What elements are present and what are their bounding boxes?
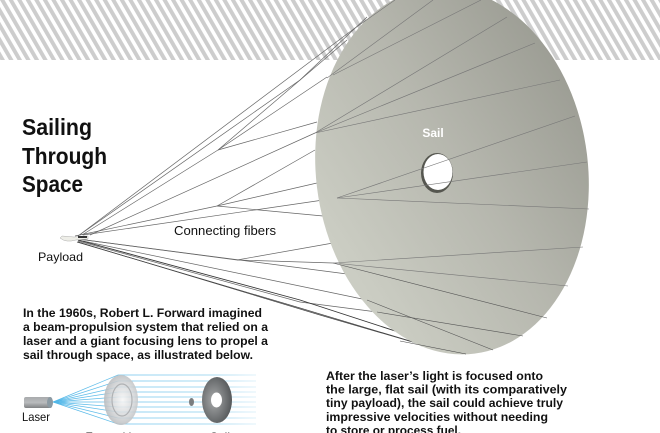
intro text: In the 1960s, Robert L. Forward imagined — [23, 307, 262, 320]
fibers across the sail — [315, 0, 589, 354]
small sail — [202, 377, 232, 423]
sail disc — [295, 0, 609, 370]
closing text: After the laser’s light is focused onto — [326, 370, 543, 383]
title — [22, 114, 107, 197]
laser diagram — [22, 375, 256, 433]
fibers behind the sail — [75, 0, 466, 354]
label: payload: Payload — [38, 250, 83, 264]
payload — [60, 236, 88, 241]
small payload — [189, 398, 194, 406]
intro text: a beam-propulsion system that relied on a — [23, 321, 269, 334]
laser beams — [53, 375, 256, 424]
label: laser: Laser — [22, 410, 50, 424]
hatched header band — [0, 0, 660, 60]
closing text: impressive velocities without needing — [326, 411, 548, 424]
closing text — [326, 370, 568, 433]
focusing lens — [104, 375, 138, 425]
title: Through — [22, 143, 107, 169]
laser body — [24, 397, 53, 408]
title: Sailing — [22, 114, 92, 140]
intro text: laser and a giant focusing lens to propel a — [23, 335, 269, 348]
label: sail: Sail — [422, 126, 444, 140]
closing text: tiny payload), the sail could achieve truly — [326, 397, 564, 410]
closing text: the large, flat sail (with its comparatively — [326, 384, 568, 396]
title: Space — [22, 171, 83, 197]
intro text — [23, 307, 269, 362]
sail hole — [421, 153, 453, 193]
intro text: sail through space, as illustrated below. — [23, 349, 253, 362]
label: connecting fibers: Connecting fibers — [174, 224, 276, 238]
